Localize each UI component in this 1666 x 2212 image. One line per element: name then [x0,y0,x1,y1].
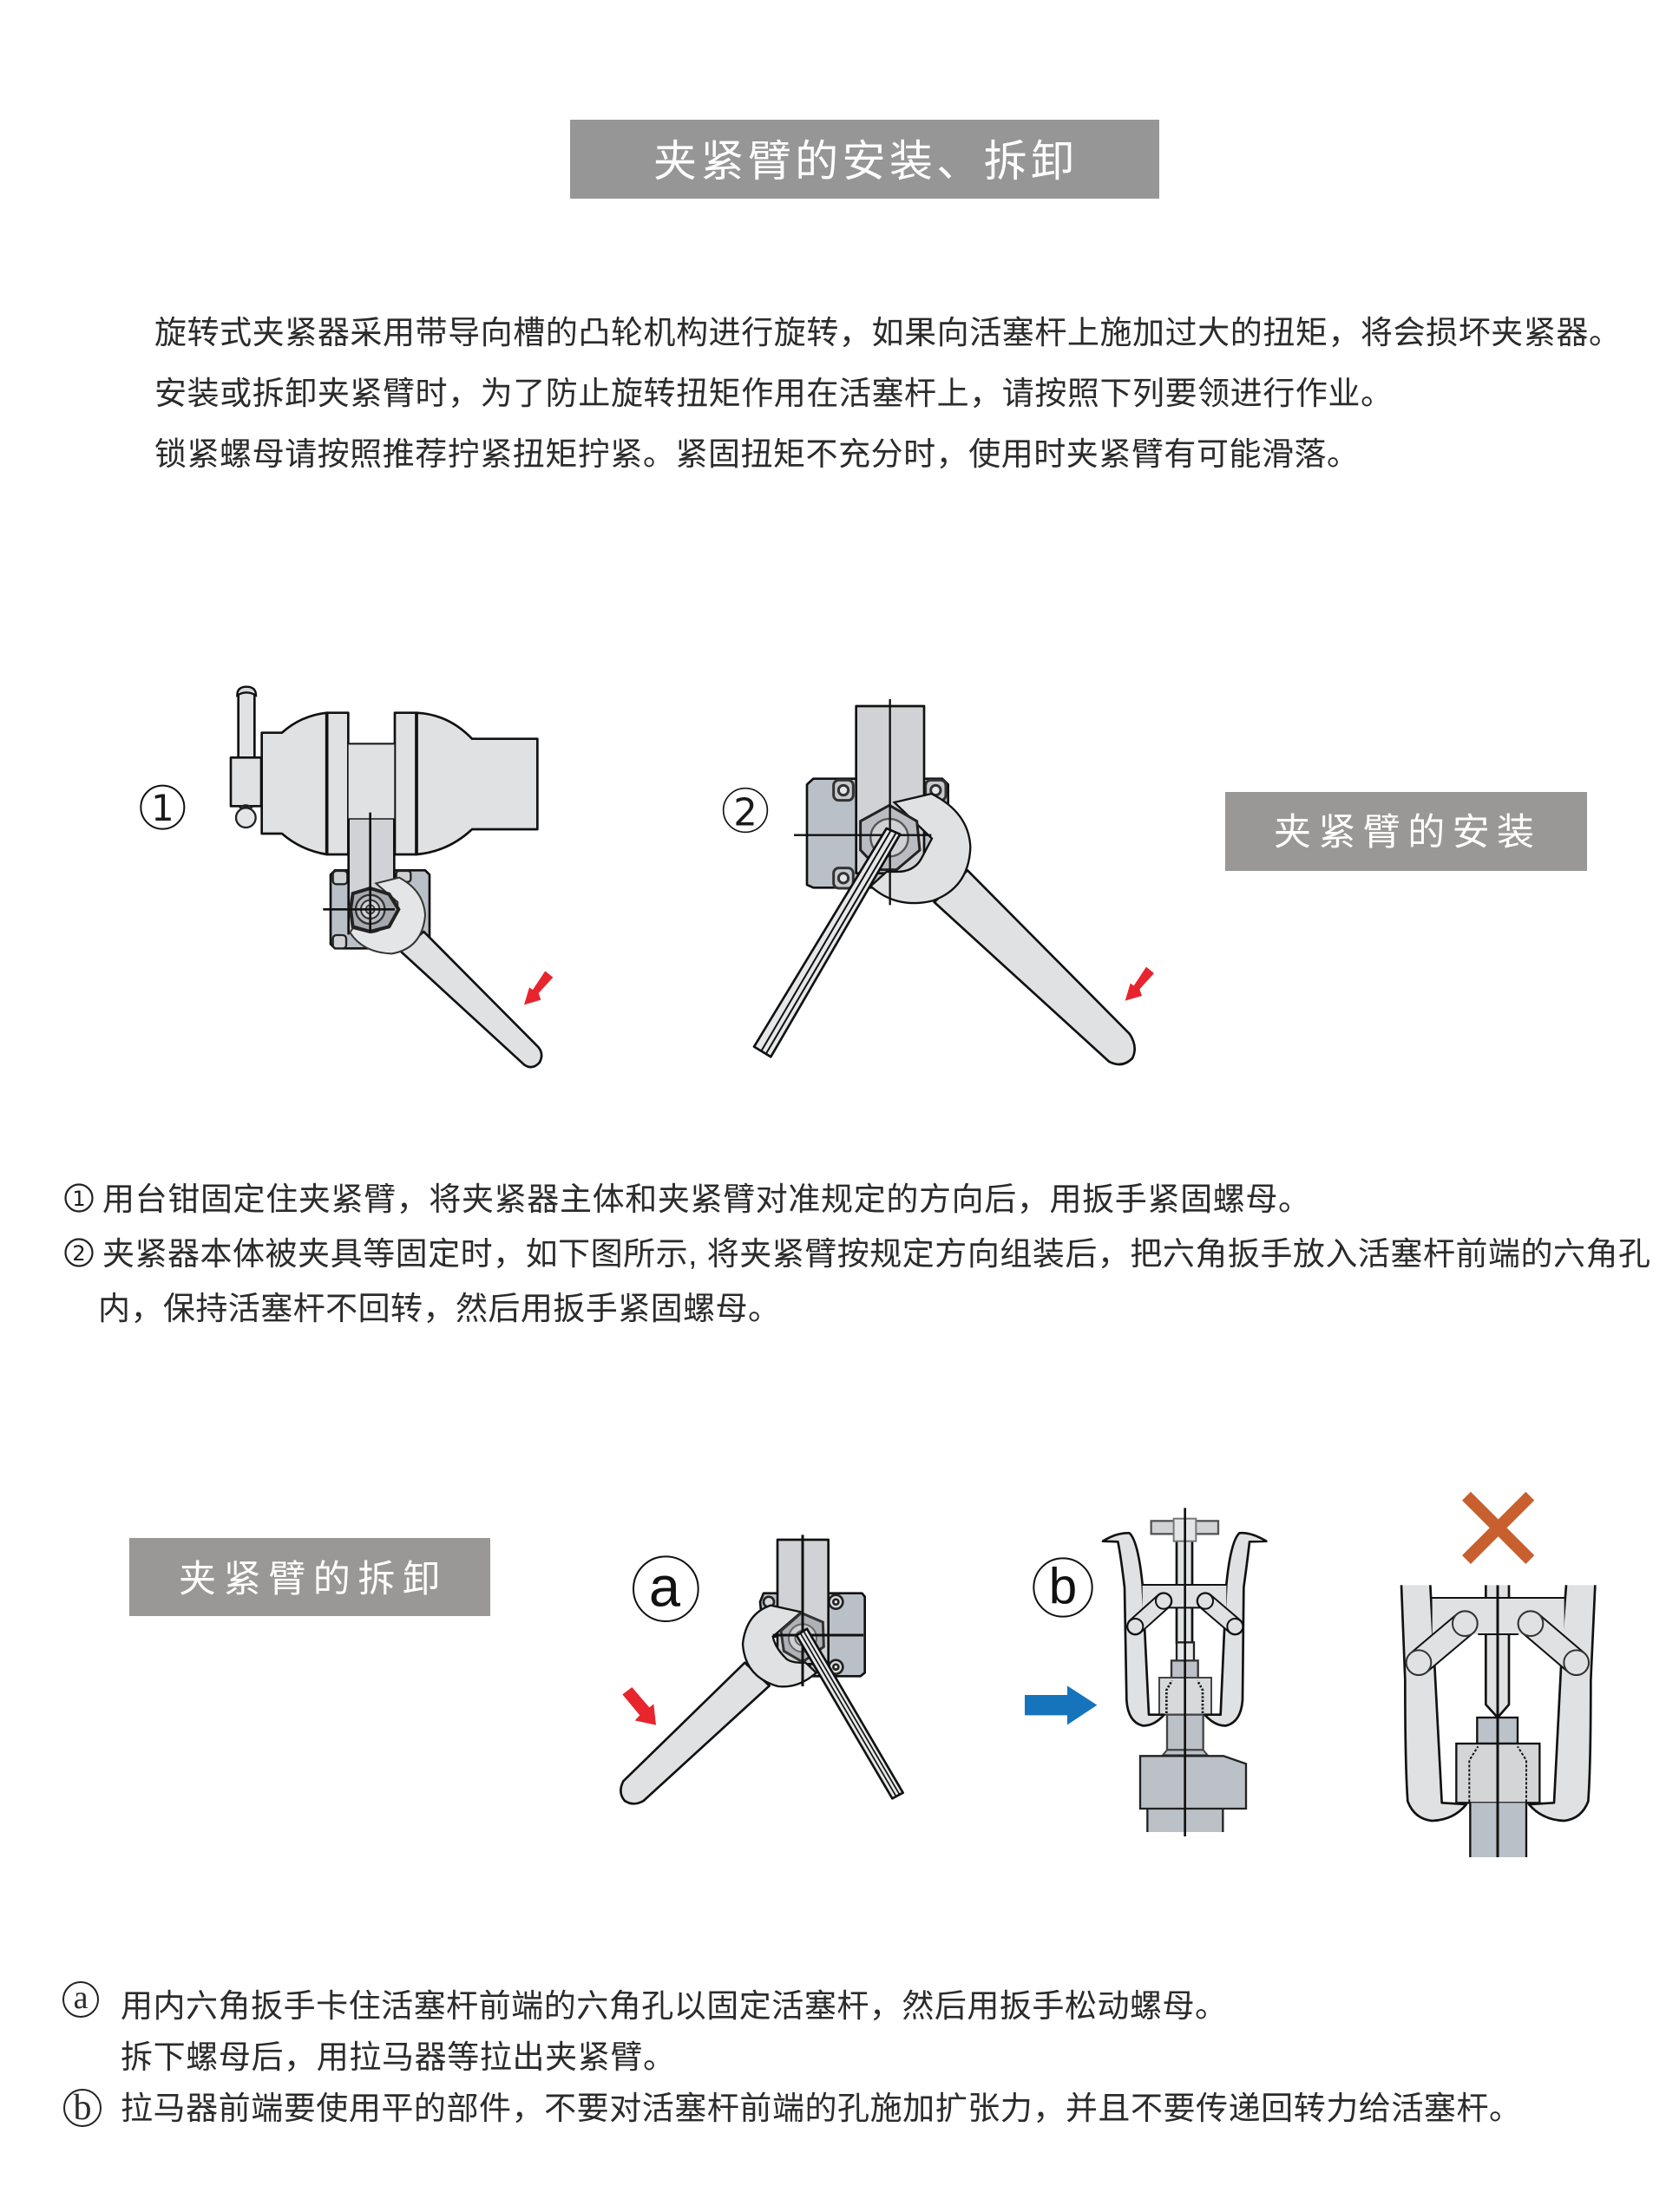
removal instructions: 用内六角扳手卡住活塞杆前端的六角孔以固定活塞杆，然后用扳手松动螺母。 [121,1988,1227,2024]
clamp arm [856,706,924,874]
centre lines [794,699,931,905]
install instructions: 用台钳固定住夹紧臂，将夹紧器主体和夹紧臂对准规定的方向后，用扳手紧固螺母。 [102,1181,1310,1217]
puller screw [1486,1585,1509,1718]
marker: circled 2: 2 [733,792,758,835]
diagram: incorrect puller use [1401,1496,1595,1857]
arrow: blue direction [1025,1685,1097,1724]
centre line [1493,1585,1501,1857]
removal instructions [63,1980,1521,2128]
diagram b: correct puller use [1025,1508,1266,1836]
clamp arm [349,819,394,934]
workpiece stack [1456,1718,1539,1857]
diagram 1: arm clamped in vise with wrench [141,687,553,1067]
centre lines [773,1535,863,1686]
marker: circled b [1033,1558,1092,1617]
base plate with bolts [807,779,948,888]
icon: orange X [1466,1496,1530,1560]
intro paragraph: 旋转式夹紧器采用带导向槽的凸轮机构进行旋转，如果向活塞杆上施加过大的扭矩，将会损坏夹紧器。 [154,315,1621,350]
wrench handle [620,1663,770,1803]
marker: circled 2 [724,789,767,835]
wrench handle [935,870,1135,1064]
arrow: red force [1125,967,1154,1001]
centre lines [323,813,395,932]
removal instructions: b [73,2088,92,2128]
cross bar [1432,1598,1564,1634]
puller jaws [1401,1585,1595,1821]
wrench head and nut [861,794,970,903]
puller links [1127,1594,1243,1634]
label: installation [1225,792,1587,871]
vise handle [231,687,261,828]
intro paragraph: 安装或拆卸夹紧臂时，为了防止旋转扭矩作用在活塞杆上，请按照下列要领进行作业。 [154,376,1393,411]
marker: circled b: b [1049,1558,1077,1614]
wrench head and nut [743,1606,823,1686]
marker: circled a [633,1555,699,1621]
intro paragraph [154,315,1621,472]
marker: circled 1: 1 [151,787,174,829]
wrench handle [401,932,541,1067]
clamp arm [777,1540,829,1664]
base plate with bolts [760,1594,865,1676]
marker: circled a: a [649,1555,681,1619]
workpiece stack [1140,1642,1246,1832]
marker: circled 1 [141,786,184,829]
install instructions: 1 [72,1187,86,1211]
install instructions: 夹紧器本体被夹具等固定时，如下图所示, 将夹紧臂按规定方向组装后，把六角扳手放入活塞杆前端的六角孔 [102,1236,1650,1272]
puller links [1407,1611,1589,1675]
removal instructions: a [74,1980,89,2016]
puller screw and handle [1151,1519,1218,1643]
hex key [754,828,900,1057]
arrow: red force [524,971,553,1005]
vise body [262,713,537,854]
cross bar [1143,1585,1226,1607]
label: removal: 夹紧臂的拆卸 [179,1559,440,1600]
wrench head and nut [350,878,425,953]
install instructions: 内，保持活塞杆不回转，然后用扳手紧固螺母。 [98,1291,780,1326]
install instructions [66,1181,1650,1326]
removal instructions: 拉马器前端要使用平的部件，不要对活塞杆前端的孔施加扩张力，并且不要传递回转力给活塞杆。 [121,2091,1521,2126]
diagram 2: hex key and wrench on clamp [724,699,1154,1064]
install instructions: 2 [72,1241,86,1266]
title banner: 夹紧臂的安装、拆卸 [653,137,1074,186]
label: removal [129,1538,490,1616]
diagram a: removing nut with hex key and wrench [620,1535,903,1803]
title banner [570,120,1159,199]
base plate with bolts [331,870,430,948]
centre line [1182,1508,1189,1836]
label: installation: 夹紧臂的安装 [1274,812,1534,854]
arrow: red force [622,1687,656,1725]
hex key [797,1629,903,1798]
intro paragraph: 锁紧螺母请按照推荐拧紧扭矩拧紧。紧固扭矩不充分时，使用时夹紧臂有可能滑落。 [154,436,1359,472]
puller jaws [1103,1533,1266,1725]
removal instructions: 拆下螺母后，用拉马器等拉出夹紧臂。 [121,2039,675,2075]
